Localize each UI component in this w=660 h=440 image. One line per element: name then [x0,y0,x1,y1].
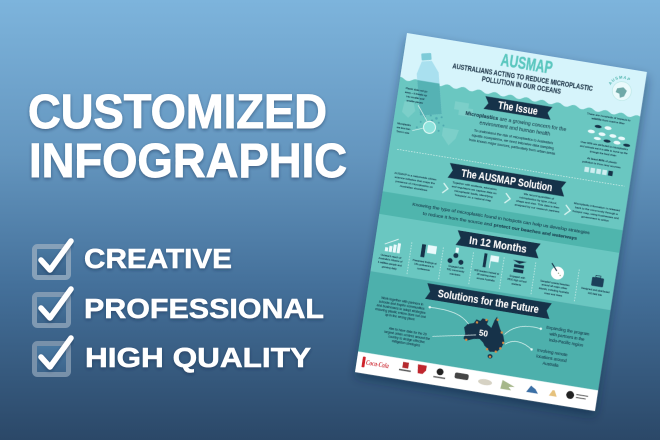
label: plastic does not go away: Plastic does not go [405,86,428,94]
icon: briefcase [591,275,604,287]
solution column 4: hotspot map, using businesses and [572,209,620,221]
main heading [28,86,347,188]
poster [352,33,652,416]
partner logos [399,361,589,403]
solution text 3: Indo-Pacific region [549,337,584,348]
wildlife text: There are hundreds of impacts to [587,112,631,123]
solution text 4: Australia [542,360,560,368]
icon: network [447,246,465,265]
12 months text 3: Engaged with [448,263,465,270]
poster background [355,33,647,411]
item: high quality: HIGH QUALITY [85,342,311,373]
12 months text 1: Australia's citizens of [378,256,403,264]
12 months text 6: coast and rivers [544,291,563,298]
12 months text 1: growing daily [381,265,398,271]
12 months text 4: 28 training event [476,272,496,279]
label: microplastics: Microplastics [397,122,412,127]
12 months text 7: Designed and distributed [581,286,610,295]
12 months text 6: around all major urban [541,283,568,291]
icon: growth chart [384,238,401,254]
chevron [564,205,571,216]
12 months text 3: 500 community [447,267,465,274]
seabird text: and animals eat it is able to move up the [580,144,628,156]
solution column 2: and regulators we capture data on [451,184,497,196]
logo: coca-cola [361,356,390,372]
solution text 3: with partners in the [549,331,585,342]
solution text 1: and businesses to adopt strategies [376,303,426,315]
solution column 1: presence of microplastics on [395,179,434,189]
issue lead text: environment and human health [479,120,551,138]
solution text 4: Involving remote [537,347,569,357]
solution text 1: schools and inspire communities [379,299,425,311]
solution text 4: locations around [536,353,568,363]
12 months text 5: 3500 high school [507,277,527,284]
leader lines [412,105,428,131]
solution column 3: analysed by our research partners [514,203,560,214]
main heading: CUSTOMIZED [28,86,327,139]
source squares [584,167,613,176]
seabird text: Over 90% are attributed to microplastics [580,140,629,152]
submerged bottle [417,80,442,116]
issue body text: aquatic ecosystems, we need intensive data sampling [471,133,554,151]
fish icons [588,124,630,148]
12 months text 4: across Australia [476,276,495,283]
panel: solutions for the future [358,271,611,390]
icon: presenter [420,244,437,259]
subtitle: AUSTRALIANS ACTING TO REDUCE MICROPLASTIC [452,61,594,93]
item: creative [34,241,232,278]
decorative pale arrows [402,101,473,145]
subtitle: POLLUTION IN OUR OCEANS [481,74,562,96]
12 months text 6: islands, including Australia [538,286,570,295]
land sources text: At least 80% of plastic [587,156,617,165]
solution column 4: government to action [581,215,610,223]
logo: coca-cola: Coca-Cola [365,359,390,371]
magnifier circle [423,120,436,134]
banner: the issue: The Issue [497,100,539,118]
logo [608,76,632,101]
solution text 1: ensuring plastic enters does not end [375,307,426,319]
icon: beach clean circle [550,262,564,280]
bottle [415,53,442,116]
chevron [504,193,511,204]
solution column 2: microplastic loads, identifying [454,189,493,199]
solution column 3: We record quantities of [523,192,554,201]
banner: 12 months: In 12 Months [468,235,528,256]
logo: AUSMAP [608,76,630,86]
chevron [442,183,449,194]
12 months text 5: students [511,282,522,287]
item: professional: PROFESSIONAL [84,293,324,324]
banner: solutions: Solutions for the Future [437,288,540,316]
land sources text: pollution is from land sources [582,159,621,170]
item: creative: CREATIVE [84,243,232,274]
solution text 2: largest urban centres around the [384,330,431,341]
12 months text 5: Engaged with [509,273,526,280]
dashed separators [407,242,579,302]
solution text 1: Work together with partners in [381,296,424,307]
microplastic particles [416,114,444,132]
map: australia: 50 [478,328,489,339]
band: knowing the type [379,191,623,253]
12 months text 2: Presented findings at [412,258,437,265]
solution text 1: up in the wrong place [385,313,415,321]
item: high quality [34,338,311,374]
label: microplastics: are less than [397,126,411,131]
solution column 2: Together with students, educators [452,180,498,192]
solution column 3: shape and size. This data is then [516,199,560,210]
solution column 3: microplastics by type, colour, [519,195,558,205]
12 months text 1: Outreach reach of [381,252,402,260]
issue body text: To understand the risk of microplastics to Australia's [474,129,554,145]
main heading: INFOGRAPHIC [29,135,347,188]
wildlife text: wildlife from marine litter [591,116,625,126]
connector lines [425,306,542,354]
12 months text 3: members [449,272,461,277]
banner: 12 months [455,230,541,258]
band: knowing the type: to reduce it from the source and protect our beaches and waterways [422,211,577,242]
issue lead text: Microplastics are a growing concern for the [465,111,567,133]
icon: flag and person [482,253,499,269]
12 months text 4: 600 leaders trained at [474,268,500,276]
12 months text 6: Sampled coastal beaches [540,278,571,287]
footer logos strip [355,351,598,411]
12 months text 2: UN conference in [414,262,435,269]
band: knowing the type: Knowing the type of microplastic found in hotspots can help us develop strategies [412,202,591,236]
solution column 1: science initiative that maps the [394,175,436,186]
wave water area [367,76,649,311]
12 months text 2: conference [417,266,431,272]
solution column 4: back to the community through a [575,205,618,216]
solution column 1: AUSMAP is a nationwide citizen [394,171,437,182]
banner: the issue [483,96,553,120]
banner: solution: The AUSMAP Solution [461,167,553,194]
solution column 1: Australian shorelines [400,184,428,192]
label: plastic does not go away: into smaller and [406,94,425,101]
label: microplastics: 5mm in size [396,130,410,135]
issue body text: from known major sources, particularly from urban areas [469,138,556,156]
solution text 2: country to design effective [388,334,425,344]
map: australia [460,312,508,360]
label: plastic does not go away: away – it breaks up [405,90,428,98]
solution column 2: 'hotspots' on a national map [454,193,492,203]
12 months text 7: 100 field kits [587,291,603,297]
label: plastic does not go away: smaller pieces [406,98,424,105]
icon: graduation [511,260,527,274]
banner: solution [448,163,566,197]
checklist [34,241,324,374]
12 months text 1: 1 million people and [378,261,402,268]
solution text 2: mitigation strategies [392,339,421,347]
solution text 2: Aim to have data for the 20 [389,326,427,336]
dashed divider [397,149,624,186]
title: AUSMAP [500,50,554,78]
solution column 4: Microplastic information is released [574,201,621,213]
seabird text: through the food chain [590,149,617,158]
solution text 3: Expanding the program [546,325,590,337]
item: professional [34,289,324,326]
